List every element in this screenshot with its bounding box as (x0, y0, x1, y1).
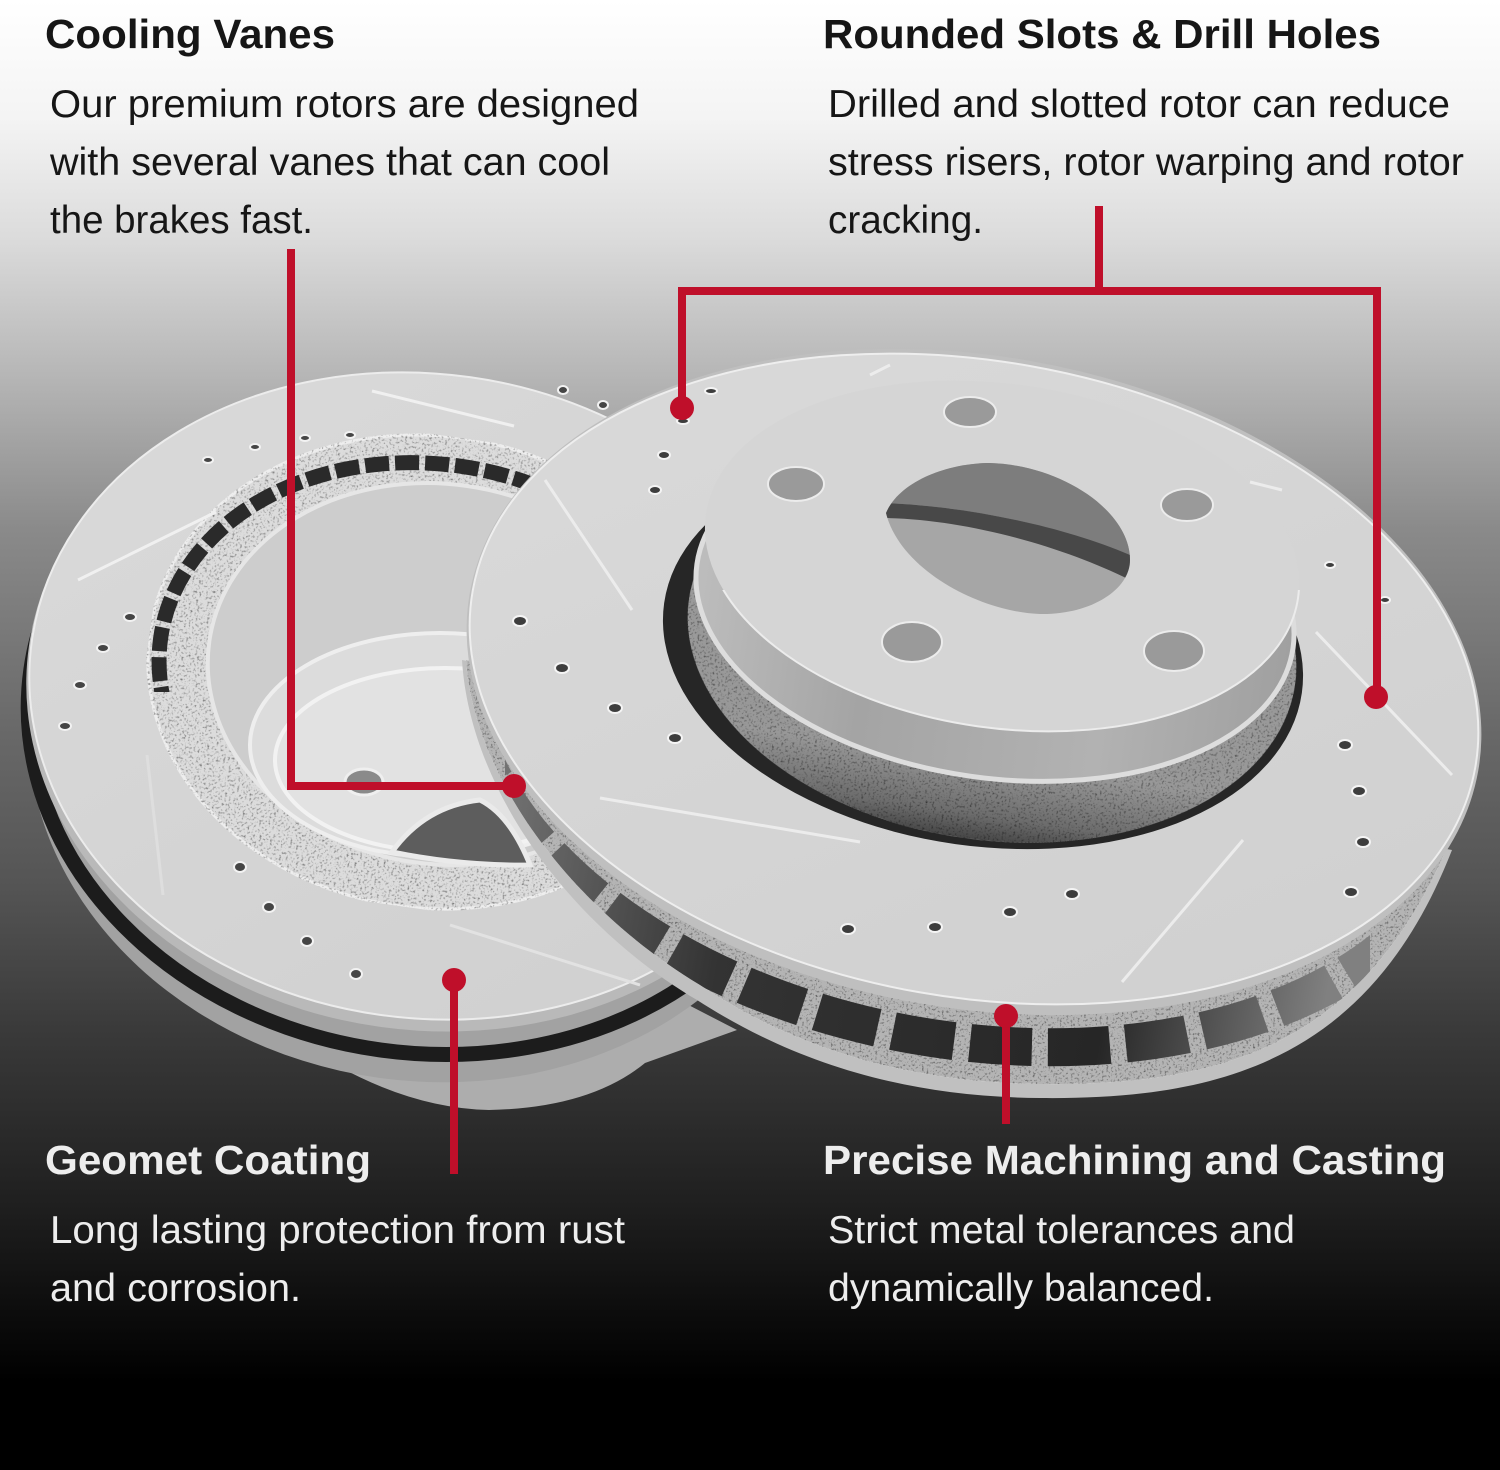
hub opening (392, 800, 530, 865)
body: geomet coating: Long lasting protection from rust (50, 1209, 625, 1252)
body: geomet coating: and corrosion. (50, 1267, 301, 1310)
text block: geomet coating (45, 1137, 625, 1310)
text block: rounded slots and drill holes (823, 11, 1464, 242)
text block: precise machining and casting (823, 1137, 1446, 1310)
body: cooling vanes: the brakes fast. (50, 199, 313, 242)
illustration: front-facing drilled and slotted rotor (462, 352, 1482, 1098)
body: cooling vanes: with several vanes that can cool (49, 141, 610, 184)
illustration: rear-facing brake rotor (20, 371, 737, 1110)
heading: rounded slots and drill holes: Rounded Slots & Drill Holes (823, 11, 1381, 57)
rotor lip (0, 322, 867, 1082)
textured bowl (661, 403, 1323, 881)
heading: precise machining and casting: Precise Machining and Casting (823, 1137, 1446, 1183)
dark opening around hat (637, 407, 1329, 889)
body: precise machining and casting (828, 1209, 1295, 1310)
body: rounded slots and drill holes (828, 83, 1464, 242)
hat top face (682, 344, 1322, 768)
hub bolt hole (345, 769, 383, 795)
rear rotor drilled holes (59, 386, 608, 979)
drilled holes (513, 388, 1390, 934)
rear rotor slots (78, 391, 640, 985)
cooling vanes (505, 760, 1370, 1066)
center bore (886, 463, 1130, 614)
callout line: geomet coating (442, 968, 466, 1174)
body: precise machining and casting: Strict metal tolerances and (828, 1209, 1295, 1252)
body: rounded slots and drill holes: Drilled and slotted rotor can reduce (828, 83, 1450, 126)
body: rounded slots and drill holes: cracking. (828, 199, 983, 242)
body: rounded slots and drill holes: stress risers, rotor warping and rotor (828, 141, 1464, 184)
rotor friction face (0, 322, 863, 1070)
body: geomet coating (50, 1209, 625, 1310)
body: precise machining and casting: dynamically balanced. (828, 1267, 1214, 1310)
body: cooling vanes: Our premium rotors are designed (50, 83, 639, 126)
callout line: precise machining (994, 1004, 1018, 1124)
inner hat plate (183, 453, 697, 895)
vent slots (152, 455, 531, 692)
rotor edge band (0, 357, 866, 1133)
edge band (462, 660, 1452, 1098)
hat side wall (673, 394, 1317, 818)
rotor hat underside (296, 980, 737, 1110)
slots (545, 365, 1452, 982)
body: cooling vanes (49, 83, 639, 242)
rotor vent gap (0, 345, 865, 1105)
callout line: rounded slots and drill holes (670, 206, 1388, 709)
hat top face lower highlight (722, 590, 1300, 732)
rotor lip (413, 272, 1500, 1092)
textured vent band (466, 660, 1446, 1084)
heading: geomet coating: Geomet Coating (45, 1137, 371, 1183)
heading: cooling vanes: Cooling Vanes (45, 11, 335, 57)
text block: cooling vanes (45, 11, 639, 242)
textured hat ring (117, 399, 743, 945)
friction face (418, 277, 1500, 1081)
callout line: cooling vanes (291, 249, 526, 798)
central stepped rings (250, 633, 630, 857)
lug holes (768, 397, 1213, 671)
